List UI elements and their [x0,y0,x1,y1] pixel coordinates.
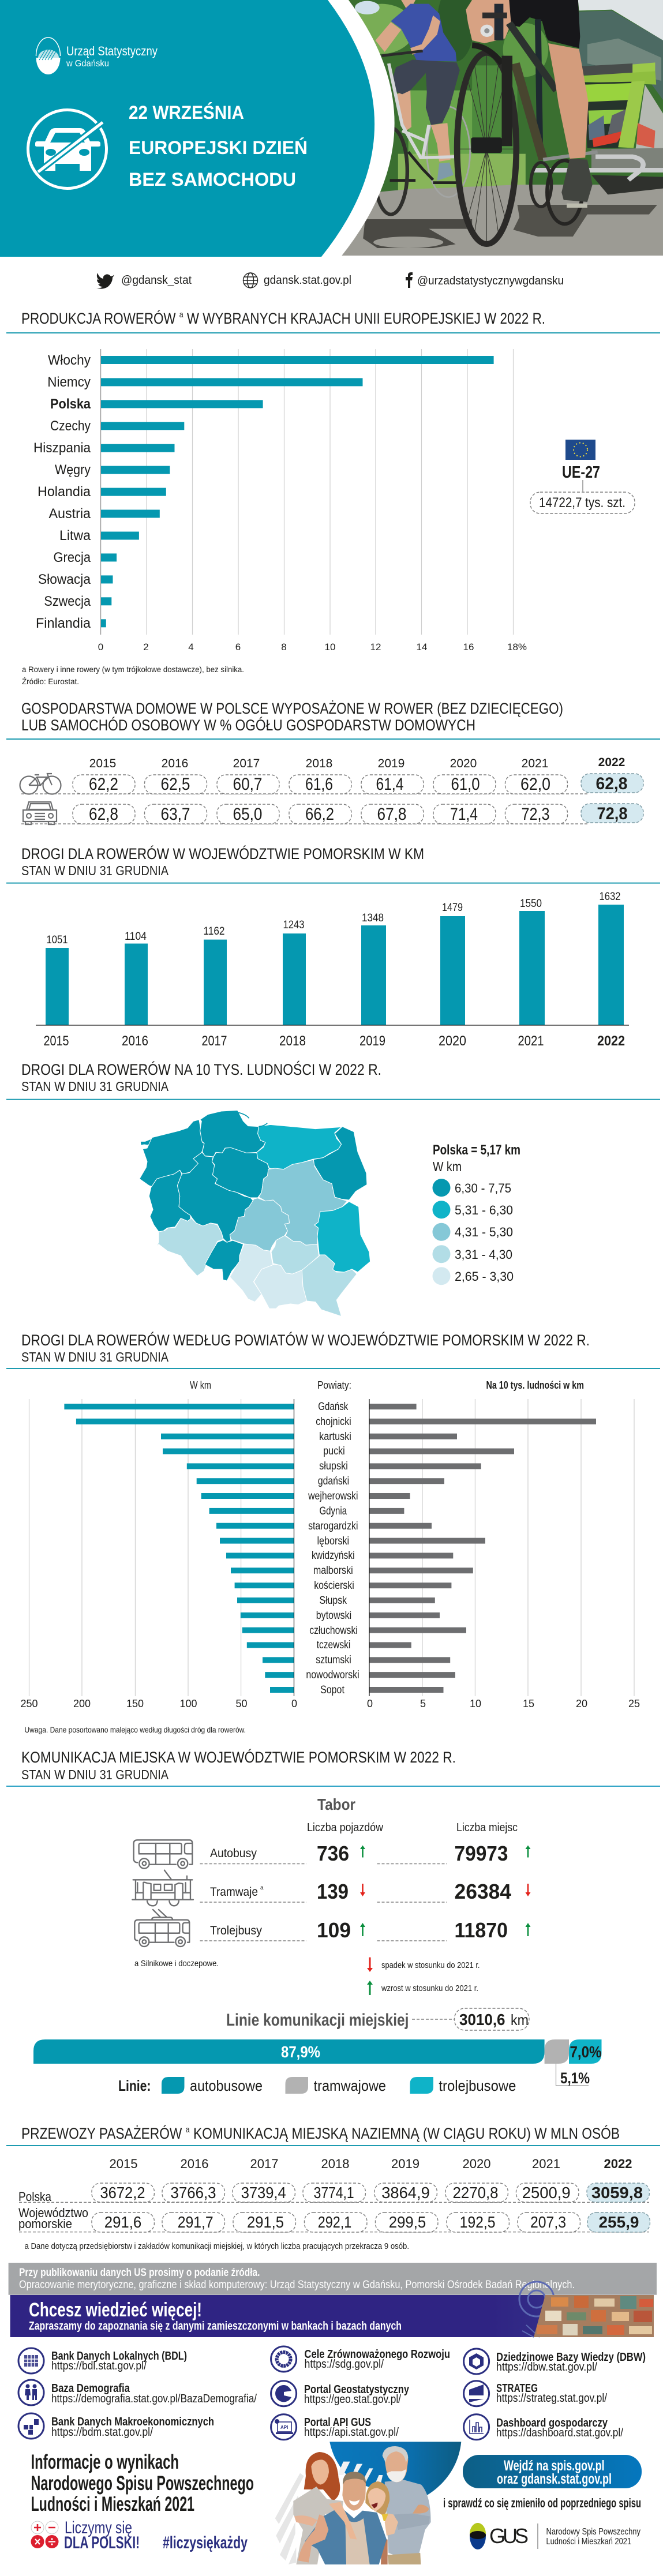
footnote: a Dane dotyczą przedsiębiorstw i zakładów komunikacji miejskiej, w których liczba pracujących przekracza 9 osób. [24,2241,409,2251]
fleet numbers: 79973 [455,1842,508,1865]
row: Polska: 3766,3 [171,2184,216,2202]
column headers: W km [190,1379,211,1391]
link: STRATEG: https://strateg.stat.gov.pl/ [496,2392,607,2405]
logo: Liczymy się dla Polski: Liczymy się [65,2518,132,2537]
link: Bank Danych Makroekonomicznych: Bank Danych Makroekonomicznych [51,2416,214,2428]
year labels: 2016 [162,757,188,770]
link: Portal API GUS [271,2414,399,2440]
bar chart: share of production: 18% [507,642,527,653]
call to action button: oraz gdansk.stat.gov.pl [497,2471,612,2487]
bar legend: tramwajowe [314,2077,386,2094]
bar chart: share of production: Polska [50,396,91,412]
year labels: 2016 [181,2157,208,2171]
row: Polska [18,2183,649,2204]
bar chart: km by year: 2022 [597,1033,625,1049]
map legend: 4,31 - 5,30 [455,1225,513,1239]
link: Baza Demografia: https://demografia.stat.gov.pl/BazaDemografia/ [51,2393,257,2405]
bar chart: share of production: 12 [370,642,381,653]
website: gdansk.stat.gov.pl [264,274,351,287]
county labels: słupski [319,1460,348,1472]
icon: no car [28,110,106,188]
bar chart: share of production: Grecja [53,550,91,565]
row: Województwo pomorskie [18,2206,650,2232]
heading: a [179,310,183,320]
row: Polska: 2500,9 [522,2184,571,2202]
hero title: 22 WRZEŚNIA [129,102,244,123]
bar chart: km by year: 1479 [442,902,463,914]
axis labels: 50 [235,1698,248,1709]
heading: KOMUNIKACJA MIEJSKA W WOJEWÓDZTWIE POMORSKIM W 2022 R. [21,1748,456,1766]
vehicle labels: Autobusy [210,1847,257,1860]
stacked bar: lines by type: 87,9% [281,2043,320,2061]
heading [21,1748,456,1782]
callout: EU-27 total: 14722,7 tys. szt. [539,495,625,511]
bar legend: Linie: [118,2077,151,2094]
link: Bank Danych Lokalnych: Bank Danych Lokalnych (BDL) [51,2350,187,2363]
map legend: W km [433,1159,462,1174]
fleet table: Liczba pojazdów [307,1821,383,1834]
bar chart: share of production: Hiszpania [33,440,91,456]
heading [21,1060,381,1094]
hero photo: cyclists [340,0,663,257]
county labels: Sopot [320,1684,345,1696]
logo: Liczymy się dla Polski: DLA POLSKI! [64,2533,140,2552]
fleet numbers [317,1842,511,1942]
stacked bar: lines by type: 5,1% [560,2069,590,2087]
axis labels [20,1698,640,1709]
map legend [433,1142,520,1285]
bar chart: share of production: Austria [48,506,91,522]
heading: a [186,2125,190,2135]
link: Portal API GUS: Portal API GUS [304,2416,371,2429]
heading: PRODUKCJA ROWERÓW [21,310,208,327]
fleet table: Tabor [317,1795,355,1813]
bar chart: km by year: 1051 [46,934,68,946]
social links row [96,272,564,289]
bar chart: share of production: Czechy [50,418,91,434]
footnote [22,665,244,686]
axis labels: 200 [73,1698,91,1709]
county labels: Słupsk [320,1595,347,1607]
panel: source note: Przy publikowaniu danych US prosimy o podanie źródła. [19,2267,260,2279]
county labels: Gdynia [320,1505,347,1517]
bar chart: share of production: 16 [463,642,474,653]
bar chart: share of production: Słowacja [38,572,91,587]
row: Województwo pomorskie: Województwo [18,2206,88,2220]
bike trailer [579,63,632,76]
bar chart: km by year: 1348 [362,912,384,924]
footnote: Źródło: Eurostat. [22,677,79,686]
map of Poland by voivodeship [140,1110,370,1317]
row: car values: 65,0 [233,805,262,824]
county labels: tczewski [317,1639,350,1651]
bar chart: km by year: 2016 [122,1033,148,1049]
census heading: Informacje o wynikach [31,2451,179,2473]
hero title: EUROPEJSKI DZIEŃ [129,137,308,158]
map legend: 6,30 - 7,75 [455,1181,511,1195]
facebook handle: @urzadstatystycznywgdansku [417,275,564,287]
year labels: 2021 [522,757,548,770]
logo: GUS census [470,2523,640,2549]
panel: bicycle production [6,309,660,686]
row: Województwo pomorskie: 291,5 [247,2213,284,2231]
bar chart: share of production: 10 [325,642,335,653]
column headers: Na 10 tys. ludności w km [486,1379,584,1391]
link: Baza Demografia [18,2380,257,2405]
vehicle labels: Trolejbusy [210,1924,262,1937]
county labels: kwidzyński [312,1550,355,1562]
transport lines heading: Linie komunikacji miejskiej [226,2011,409,2030]
icon: facebook [406,272,413,288]
bar chart: km by year: 2020 [439,1033,466,1049]
fleet numbers: 11870 [455,1918,508,1942]
year labels: 2017 [250,2157,278,2171]
year labels: 2019 [391,2157,419,2171]
row: car values: 62,8 [89,805,118,824]
panel: want to know more banner [10,2282,655,2337]
census heading: Narodowego Spisu Powszechnego [31,2472,254,2495]
row: bicycle values: 62,5 [160,775,190,794]
hero title [129,102,308,190]
heading: W WYBRANYCH KRAJACH UNII EUROPEJSKIEJ W 2022 R. [183,310,545,327]
axis labels: 150 [126,1698,144,1709]
icon: bus [134,1840,192,1869]
link: STRATEG: STRATEG [496,2382,538,2395]
row: Województwo pomorskie: 255,9 [599,2213,639,2231]
bar chart: km by year: 1550 [520,898,542,910]
bar chart: share of production: Litwa [59,528,91,543]
bar chart: km by year: 1243 [283,919,305,931]
twitter handle: @gdansk_stat [121,274,192,287]
arrow legend [367,1958,480,1995]
row: bicycle values: 61,0 [451,775,480,794]
row: bicycle values: 61,6 [305,775,333,794]
bar chart: km by year: 1162 [203,925,225,938]
axis labels: 100 [179,1698,197,1709]
year labels: 2022 [598,756,625,769]
transport lines heading: 3010,6 [459,2011,505,2028]
link: Bank Danych Lokalnych [18,2348,187,2373]
fleet table [132,1795,530,1947]
axis labels: 20 [576,1698,587,1709]
link: Portal API GUS: API [280,2425,288,2430]
call to action button [463,2455,642,2488]
transport lines heading: km [511,2011,529,2028]
heading: STAN W DNIU 31 GRUDNIA [21,1349,169,1364]
bar chart: km by year: 2017 [202,1033,227,1049]
bar chart: km by year: 2019 [359,1033,385,1049]
county labels: starogardzki [308,1520,358,1532]
bar chart: share of production: 14 [417,642,427,653]
link: Bank Danych Makroekonomicznych [18,2413,214,2439]
row: car values: 72,8 [597,804,628,823]
row: Województwo pomorskie: 291,7 [178,2213,213,2231]
link: Cele Zrównoważonego Rozwoju: Cele Zrównoważonego Rozwoju [305,2348,450,2361]
row: Województwo pomorskie: 207,3 [530,2213,566,2231]
logo: Urząd Statystyczny w Gdańsku [36,38,158,74]
link: Portal Geostatystyczny: https://geo.stat.gov.pl/ [304,2393,401,2406]
bar legend [118,2077,516,2094]
row: car values: 72,3 [522,805,549,824]
census heading [31,2451,254,2515]
vehicle labels: a [260,1885,264,1891]
logo: GUS census: GUS [489,2524,529,2548]
link: Cele Zrównoważonego Rozwoju: https://sdg.gov.pl/ [305,2358,384,2371]
logo: Urząd Statystyczny w Gdańsku: w Gdańsku [66,59,109,69]
map legend: 5,31 - 6,30 [455,1203,513,1217]
heading: LUB SAMOCHÓD OSOBOWY W % OGÓŁU GOSPODARSTW DOMOWYCH [21,716,475,734]
row: bicycle values: 62,2 [89,775,118,794]
county labels: lęborski [317,1535,349,1547]
bar chart: share of production: 0 [98,642,103,653]
heading [21,1331,590,1364]
year labels: 2018 [321,2157,349,2171]
callout: EU-27 total [530,440,635,513]
rider two [466,0,511,43]
panel: want to know more banner: Chcesz wiedzieć więcej! [29,2299,202,2321]
bar chart: share of production: 6 [235,642,241,653]
panel: hero header [0,0,663,257]
row: Województwo pomorskie: 192,5 [460,2213,496,2231]
year labels [110,2157,632,2171]
row: Województwo pomorskie: 291,6 [104,2213,141,2231]
link: Portal Geostatystyczny [271,2381,410,2406]
icon: tram [132,1870,193,1906]
arrow legend: spadek w stosunku do 2021 r. [381,1960,480,1970]
panel: passenger transport table [6,2124,660,2251]
panel: census 2021 promotion [31,2442,642,2564]
footnote: a Silnikowe i doczepowe. [134,1959,219,1968]
bar chart: km by year [36,891,629,1049]
bar chart: share of production: 4 [188,642,194,653]
row: Polska: Polska [18,2189,52,2204]
bar chart: share of production [33,349,527,653]
fleet numbers: 26384 [455,1880,511,1903]
county labels: wejherowski [308,1490,358,1502]
county labels: nowodworski [306,1669,359,1681]
row: bicycle values: 60,7 [233,775,262,794]
bar legend: autobusowe [190,2077,263,2094]
icon: globe [244,273,257,288]
county labels: malborski [313,1565,353,1577]
icon: trolleybus [134,1910,189,1947]
axis labels: 15 [523,1698,534,1709]
vehicle labels [210,1847,264,1937]
bar legend: trolejbusowe [439,2077,516,2094]
link: Portal API GUS: https://api.stat.gov.pl/ [304,2426,399,2439]
year labels: 2020 [463,2157,490,2171]
row: car values: 67,8 [377,805,406,824]
row: Polska: 3672,2 [100,2184,145,2202]
hashtag: #liczysiękażdy [163,2533,248,2552]
link: Bank Danych Makroekonomicznych: https://bdm.stat.gov.pl/ [51,2426,153,2439]
logo: GUS census: Ludności i Mieszkań 2021 [546,2537,631,2547]
panel: want to know more banner: Zapraszamy do zapoznania się z danymi zamieszczonymi w bankach i bazach danych [29,2320,402,2333]
heading: STAN W DNIU 31 GRUDNIA [21,863,169,878]
heading: DROGI DLA ROWERÓW NA 10 TYS. LUDNOŚCI W 2022 R. [21,1060,381,1078]
link: Baza Demografia: Baza Demografia [51,2382,130,2395]
teal panel [0,0,374,257]
axis labels: 250 [20,1698,38,1709]
fleet numbers: 736 [317,1842,349,1865]
year labels: 2020 [450,757,477,770]
row: Województwo pomorskie: pomorskie [18,2217,72,2231]
white arc [312,0,395,257]
axis labels: 0 [291,1698,297,1709]
heading: DROGI DLA ROWERÓW W WOJEWÓDZTWIE POMORSKIM W KM [21,845,424,863]
logo: Liczymy się dla Polski [31,2518,140,2552]
heading [21,845,424,878]
heading: STAN W DNIU 31 GRUDNIA [21,1767,169,1782]
link: Portal Geostatystyczny: Portal Geostatystyczny [304,2383,410,2396]
heading: PRZEWOZY PASAŻERÓW [21,2125,212,2142]
bar chart: km by year: 2015 [44,1033,69,1049]
panel: source note: Opracowanie merytoryczne, graficzne i skład komputerowy: Urząd Statystyczny w Gdańsku, Pomorski Ośrodek Badań Regionalnych. [19,2279,575,2291]
vehicle labels: Tramwaje [210,1885,258,1899]
butterfly chart [20,1399,640,1709]
footnote: a Rowery i inne rowery (w tym trójkołowe dostawcze), bez silnika. [22,665,244,674]
county labels: Gdańsk [318,1401,349,1413]
year labels: 2015 [89,757,116,770]
link: Bank Danych Lokalnych: https://bdl.stat.gov.pl/ [51,2360,147,2372]
heading [21,699,563,734]
link: Cele Zrównoważonego Rozwoju [271,2346,450,2372]
fleet numbers: 139 [317,1880,349,1903]
row: Polska: 3059,8 [591,2184,643,2202]
panel: bicycle roads per 10k population map [6,1060,660,1317]
bar chart: share of production: Holandia [38,484,91,500]
transport lines heading [226,2008,529,2030]
link: Dashboard gospodarczy [464,2414,623,2440]
bar chart: share of production: Finlandia [36,616,91,631]
bar chart: share of production: Włochy [48,353,91,368]
row: car values: 66,2 [305,805,334,824]
column headers [190,1379,584,1391]
panel: public transport [6,1748,660,2094]
county labels: gdański [318,1475,349,1487]
heading: GOSPODARSTWA DOMOWE W POLSCE WYPOSAŻONE W ROWER (BEZ DZIECIĘCEGO) [21,699,563,717]
row: car values [21,804,643,824]
row: Polska: 2270,8 [452,2184,499,2202]
right bars: per 10k population [369,1404,596,1693]
map legend: 3,31 - 4,30 [455,1247,512,1262]
call to action button: Wejdź na spis.gov.pl [504,2458,605,2474]
link: Dashboard gospodarczy: Dashboard gospodarczy [496,2417,608,2429]
row: Polska: 3864,9 [381,2184,430,2202]
row: bicycle values [21,774,643,794]
panel: bicycle roads by county [6,1331,660,1734]
arrow legend: wzrost w stosunku do 2021 r. [381,1983,478,1993]
bar chart: share of production: 2 [143,642,149,653]
icon: bicycle [20,774,61,794]
icon: EU flag [565,440,595,460]
bar chart: share of production: Szwecja [44,594,91,609]
county labels: bytowski [316,1610,351,1622]
bar chart: km by year: 2021 [518,1033,544,1049]
census heading: Ludności i Mieszkań 2021 [31,2493,194,2515]
year labels: 2015 [110,2157,137,2171]
map legend: 2,65 - 3,30 [455,1269,514,1284]
logo: GUS census: Narodowy Spis Powszechny [546,2527,640,2537]
year labels: 2022 [604,2157,632,2171]
row: bicycle values: 62,8 [595,774,628,793]
row: car values: 63,7 [160,805,190,824]
axis labels: 0 [367,1698,373,1709]
county labels: człuchowski [309,1625,358,1637]
year labels: 2017 [233,757,260,770]
icon: twitter [96,273,114,289]
heading: STAN W DNIU 31 GRUDNIA [21,1079,169,1094]
panel: households with bicycle or car [6,699,660,824]
county labels: pucki [323,1445,345,1457]
county labels: sztumski [316,1654,351,1666]
rider one [427,107,470,197]
photo: family of four [275,2442,461,2564]
axis labels: 25 [628,1698,640,1709]
fleet numbers: 109 [317,1918,351,1942]
link: Dziedzinowe Bazy Wiedzy [464,2349,646,2374]
county labels [306,1401,359,1696]
bar chart: share of production: Węgry [55,462,91,478]
bar chart: share of production: Niemcy [47,374,91,390]
logo: Urząd Statystyczny w Gdańsku: Urząd Statystyczny [66,44,158,58]
bar chart: km by year: 1632 [599,891,621,903]
panel: source note [9,2263,657,2295]
stacked bar: lines by type: 7,0% [570,2043,602,2061]
stacked bar: lines by type [33,2039,602,2087]
year labels: 2021 [532,2157,560,2171]
column headers: Powiaty: [317,1379,351,1391]
year labels: 2019 [378,757,404,770]
map legend: Polska = 5,17 km [433,1142,520,1158]
panel: bicycle roads in Pomorskie [6,845,660,1049]
link: STRATEG [464,2381,607,2406]
bar chart: km by year: 2018 [279,1033,306,1049]
county labels: chojnicki [316,1416,351,1428]
year labels [89,756,625,770]
row: Polska: 3774,1 [314,2184,354,2202]
year labels: 2018 [306,757,332,770]
hero title: BEZ SAMOCHODU [129,169,296,190]
row: bicycle values: 61,4 [376,775,404,794]
bar chart: share of production: 8 [281,642,287,653]
axis labels: 5 [420,1698,426,1709]
link: Dashboard gospodarczy: https://dashboard.stat.gov.pl/ [496,2427,623,2439]
callout: EU-27 total: UE-27 [562,463,600,482]
icon: car [23,802,57,824]
bar chart: km by year: 1104 [125,931,147,943]
link: Dziedzinowe Bazy Wiedzy: https://dbw.stat.gov.pl/ [496,2361,597,2373]
row: Województwo pomorskie: 299,5 [389,2213,426,2231]
row: Województwo pomorskie: 292,1 [318,2213,351,2231]
left bars: km [64,1404,294,1693]
fleet table: Liczba miejsc [456,1821,518,1834]
county labels: kościerski [314,1580,354,1592]
row: bicycle values: 62,0 [520,775,550,794]
row: Polska: 3739,4 [241,2184,286,2202]
banner decoration: aerial city photo [519,2282,655,2337]
row: car values: 71,4 [450,805,478,824]
axis labels: 10 [470,1698,481,1709]
change arrows [360,1845,531,1936]
panel: data portals links [18,2346,646,2440]
county labels: kartuski [319,1431,351,1443]
note: Uwaga. Dane posortowano malejąco według długości dróg dla rowerów. [24,1725,246,1734]
